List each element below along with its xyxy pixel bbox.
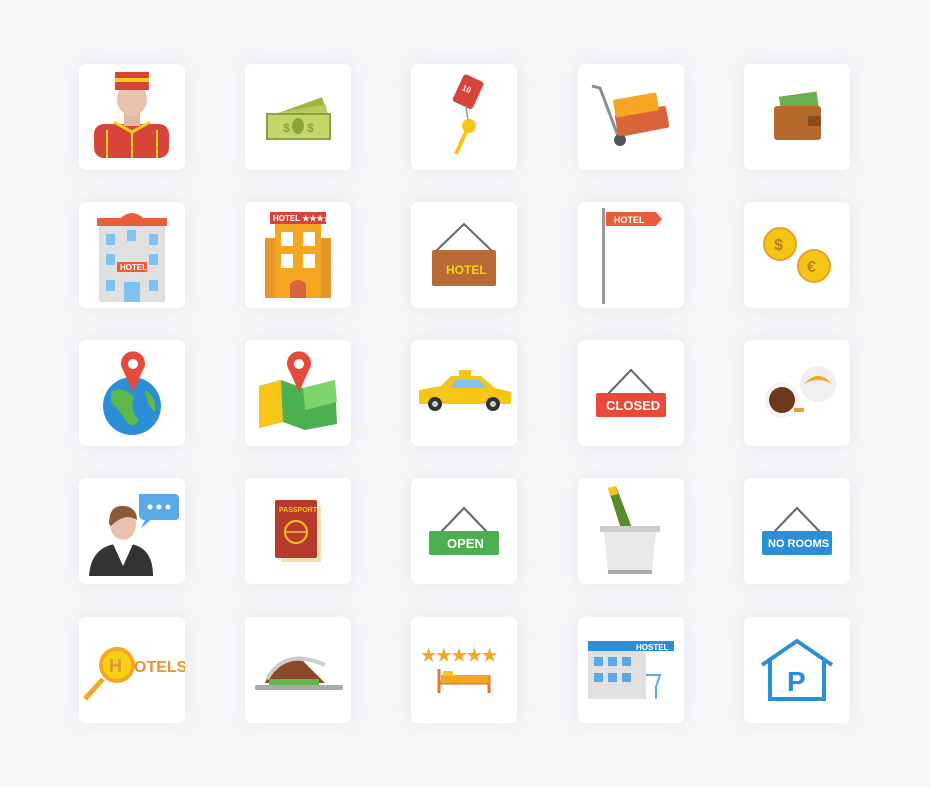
card: hotel sign	[411, 202, 517, 308]
card: coins: $	[774, 237, 783, 254]
card: taxi	[411, 340, 517, 446]
card: bellboy	[79, 64, 185, 170]
card: hostel	[578, 617, 684, 723]
card: food cloche	[245, 617, 351, 723]
card: parking	[744, 617, 850, 723]
card: open sign	[411, 478, 517, 584]
card: hotel flag	[578, 202, 684, 308]
card: receptionist	[79, 478, 185, 584]
card: hotel stars building	[245, 202, 351, 308]
card: coins: €	[807, 259, 816, 276]
card: money: $	[283, 121, 290, 135]
card: search hotels: H	[109, 656, 122, 676]
card: hotel stars building: HOTEL ★★★★	[273, 214, 332, 223]
card: key	[411, 64, 517, 170]
card: key: 10	[461, 83, 473, 95]
card: coins	[744, 202, 850, 308]
card: champagne	[578, 478, 684, 584]
card: globe	[79, 340, 185, 446]
card: parking: P	[787, 666, 806, 697]
card: hotel building	[79, 202, 185, 308]
card: closed sign: CLOSED	[606, 398, 660, 413]
card: money: $	[307, 121, 314, 135]
card: hotel flag: HOTEL	[614, 215, 645, 225]
card: five star bed	[411, 617, 517, 723]
card: closed sign	[578, 340, 684, 446]
card: passport: PASSPORT	[279, 507, 318, 514]
card: five star bed: ★★★★★	[421, 646, 498, 665]
card: search hotels	[79, 617, 185, 723]
card: luggage cart	[578, 64, 684, 170]
card: no rooms sign: NO ROOMS	[768, 538, 829, 550]
card: hotel building: HOTEL	[120, 263, 147, 272]
card: no rooms sign	[744, 478, 850, 584]
card: hotel sign: HOTEL	[446, 263, 487, 277]
card: money	[245, 64, 351, 170]
card: passport	[245, 478, 351, 584]
card: map	[245, 340, 351, 446]
card: coffee croissant	[744, 340, 850, 446]
card: hostel: HOSTEL	[636, 643, 669, 652]
card: wallet	[744, 64, 850, 170]
card: open sign: OPEN	[447, 536, 484, 551]
